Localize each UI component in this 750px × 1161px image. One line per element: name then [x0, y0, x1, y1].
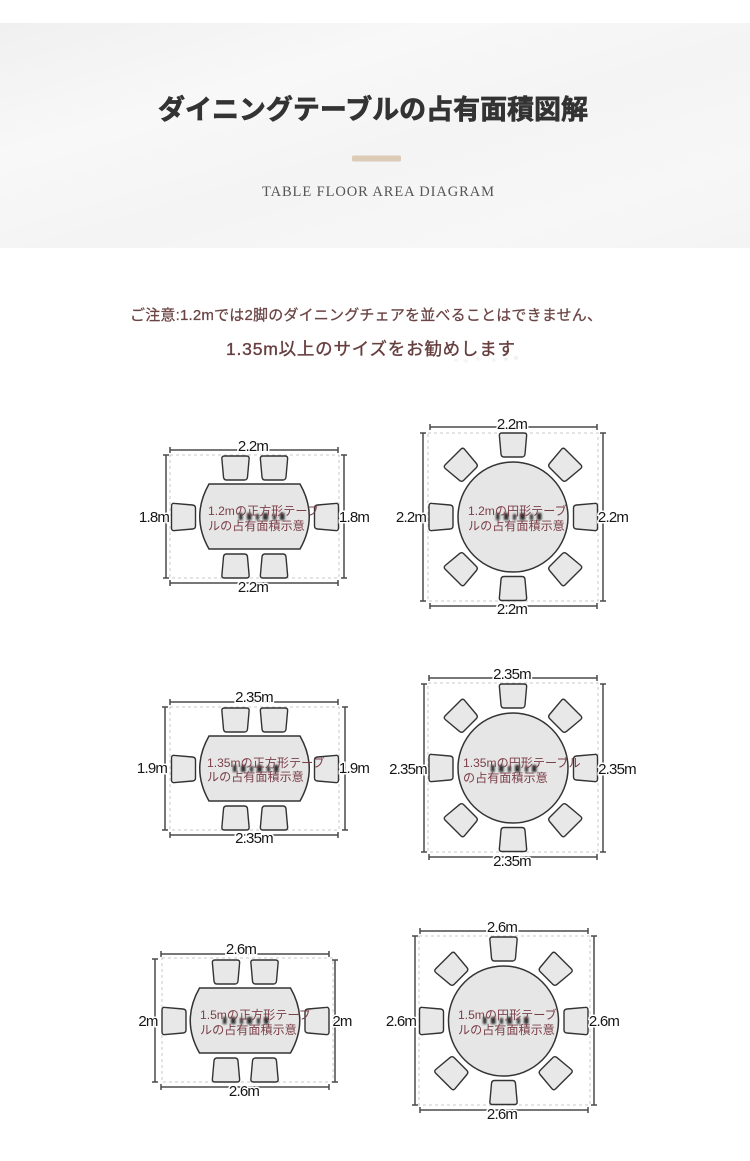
- header band: [0, 23, 750, 248]
- dimension labels: 1.8m: [139, 509, 169, 526]
- diagram: 1.5m rectangular table: [138, 941, 352, 1100]
- dimension labels: 2.2m: [238, 579, 268, 596]
- dimension labels: 2.2m: [396, 509, 426, 526]
- dimension labels: 2.2m: [497, 416, 527, 433]
- dimension labels: 2.6m: [487, 1106, 517, 1123]
- notice line 1: ご注意:1.2mでは2脚のダイニングチェアを並べることはできません、: [130, 307, 602, 324]
- overlay caption: ルの占有面積示意: [207, 769, 304, 784]
- dimension labels: 2.35m: [493, 853, 531, 870]
- decorative specks under notice: [455, 357, 517, 362]
- furniture: [420, 937, 588, 1104]
- overlay caption: ルの占有面積示意: [200, 1022, 297, 1037]
- overlay caption: ルの占有面積示意: [468, 518, 565, 533]
- furniture: [429, 433, 598, 600]
- diagram: 1.35m round table: [389, 666, 636, 870]
- dimension labels: 2.2m: [598, 509, 628, 526]
- notice text: [130, 307, 602, 359]
- overlay caption: 1.2mの円形テーブ: [468, 503, 567, 518]
- dimension labels: 2.35m: [493, 666, 531, 683]
- overlay caption: 1.35mの正方形テーブ: [207, 755, 325, 770]
- overlay caption: 1.35mの円形テーブル: [463, 755, 581, 770]
- dimension labels: 2.35m: [235, 689, 273, 706]
- dimension labels: 2.2m: [238, 438, 268, 455]
- notice line 2: 1.35m以上のサイズをお勧めします: [226, 339, 515, 359]
- furniture: [172, 708, 338, 830]
- dimension labels: 2.6m: [386, 1013, 416, 1030]
- dimension labels: 2.2m: [497, 601, 527, 618]
- subtitle: TABLE FLOOR AREA DIAGRAM: [262, 184, 494, 200]
- dimension labels: [139, 438, 369, 596]
- furniture: [162, 960, 329, 1082]
- dimension labels: [386, 919, 619, 1123]
- furniture: [172, 456, 338, 578]
- overlay caption: 1.5mの正方形テーブ: [200, 1007, 311, 1022]
- dimension labels: 2.6m: [229, 1083, 259, 1100]
- overlay caption: の占有面積示意: [463, 770, 548, 785]
- dimension labels: [396, 416, 628, 618]
- dimension labels: 2m: [138, 1013, 158, 1030]
- dimension labels: [389, 666, 636, 870]
- title: ダイニングテーブルの占有面積図解: [158, 94, 588, 125]
- dimension labels: 2.35m: [389, 761, 427, 778]
- diagram: 1.5m round table: [386, 919, 619, 1123]
- diagram: 1.2m round table: [396, 416, 628, 618]
- dimension labels: 2.35m: [598, 761, 636, 778]
- dimension labels: [138, 941, 352, 1100]
- overlay caption: ルの占有面積示意: [458, 1022, 555, 1037]
- dimension labels: 1.9m: [339, 760, 369, 777]
- overlay caption: ルの占有面積示意: [208, 518, 305, 533]
- dimension labels: 2.6m: [487, 919, 517, 936]
- overlay caption: 1.5mの円形テーブ: [458, 1007, 557, 1022]
- dimension labels: 2.35m: [235, 830, 273, 847]
- dimension labels: 1.9m: [137, 760, 167, 777]
- dimension labels: 2m: [332, 1013, 352, 1030]
- dimension labels: 2.6m: [226, 941, 256, 958]
- furniture: [429, 684, 598, 852]
- dimension labels: 1.8m: [339, 509, 369, 526]
- diagram: 1.2m rectangular table: [139, 438, 369, 596]
- diagram: 1.35m rectangular table: [137, 689, 369, 847]
- accent rule: [352, 156, 401, 162]
- dimension labels: [137, 689, 369, 847]
- dimension labels: 2.6m: [589, 1013, 619, 1030]
- overlay caption: 1.2mの正方形テーブ: [208, 503, 319, 518]
